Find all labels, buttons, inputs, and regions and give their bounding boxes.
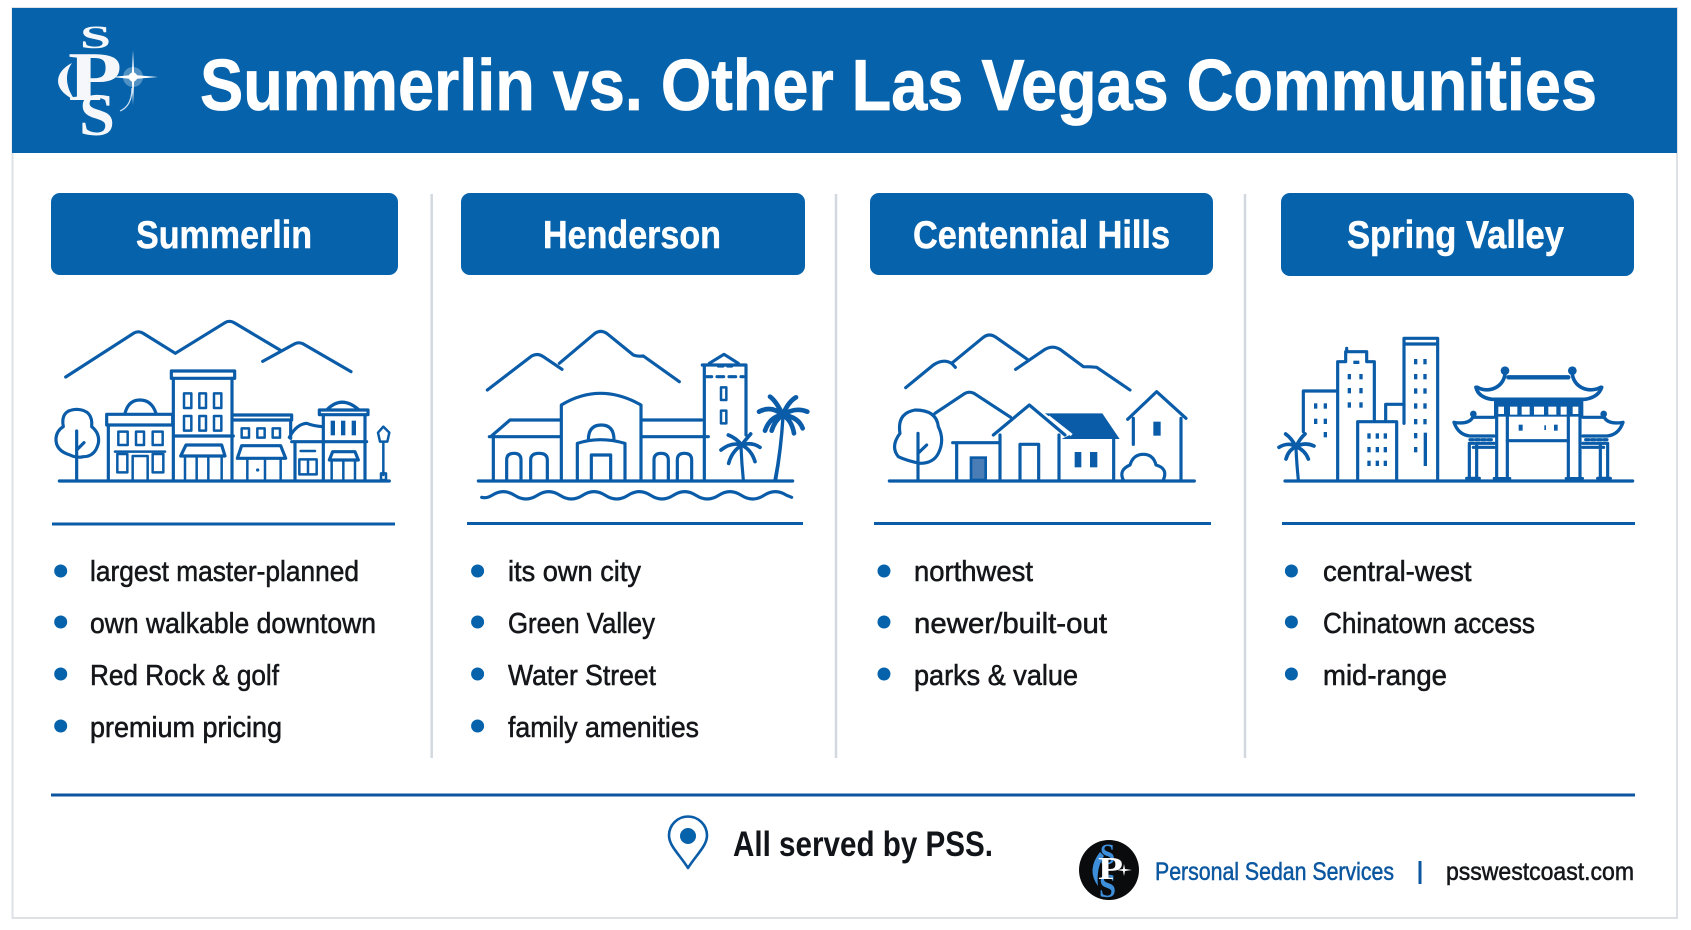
footer brand name: Personal Sedan Services — [1155, 858, 1394, 886]
icon: high-rises and Chinatown gate — [1279, 338, 1633, 481]
list: Summerlin: premium pricing — [90, 712, 282, 744]
footer brand logo: P — [1098, 850, 1123, 886]
header logo: P — [68, 39, 122, 116]
list: Henderson: its own city — [508, 556, 641, 588]
list: Summerlin: own walkable downtown — [90, 608, 376, 640]
list: Spring Valley: mid-range — [1323, 660, 1447, 692]
list: Henderson: Green Valley — [508, 608, 655, 640]
icon: downtown street with mountains — [56, 321, 389, 481]
heading: Henderson — [461, 193, 805, 275]
panel: Spring Valley — [1279, 193, 1635, 692]
list: Henderson: family amenities — [508, 712, 699, 744]
list: Spring Valley — [1285, 556, 1535, 692]
list: Summerlin: largest master-planned — [90, 556, 359, 588]
header logo: S — [80, 20, 111, 56]
header banner — [12, 8, 1677, 153]
list: Centennial Hills: parks & value — [914, 660, 1078, 692]
heading: Centennial Hills: Centennial Hills — [913, 214, 1170, 257]
heading: Summerlin — [51, 193, 398, 275]
panel: Henderson — [461, 193, 807, 744]
list: Centennial Hills: northwest — [914, 556, 1033, 588]
column dividers — [432, 194, 1245, 758]
footer brand logo: S — [1100, 838, 1115, 871]
header logo — [58, 20, 158, 148]
callout: all served by PSS: All served by PSS. — [733, 825, 993, 864]
footer website: psswestcoast.com — [1446, 858, 1634, 886]
footer brand logo: S — [1099, 868, 1116, 905]
list: Summerlin: Red Rock & golf — [90, 660, 280, 692]
icon: location pin — [669, 817, 707, 868]
heading: Henderson: Henderson — [543, 214, 721, 257]
list: Centennial Hills — [878, 556, 1107, 692]
footer rule — [51, 794, 1635, 796]
icon: mission building, tower, palms and water — [478, 331, 807, 499]
footer separator — [1418, 861, 1422, 884]
header logo: S — [79, 82, 115, 148]
heading: Spring Valley — [1281, 193, 1634, 276]
heading: Spring Valley: Spring Valley — [1347, 214, 1564, 257]
panel: Centennial Hills — [870, 193, 1213, 692]
list: Centennial Hills: newer/built-out — [914, 608, 1107, 640]
list: Spring Valley: central-west — [1323, 556, 1472, 588]
panel: Summerlin — [51, 193, 398, 744]
icon: suburban houses with mountains — [889, 335, 1194, 481]
list: Henderson: Water Street — [508, 660, 656, 692]
heading: Centennial Hills — [870, 193, 1213, 275]
heading: Summerlin: Summerlin — [136, 214, 312, 257]
footer brand logo — [1079, 838, 1139, 905]
list: Spring Valley: Chinatown access — [1323, 608, 1535, 640]
list: Summerlin — [54, 556, 376, 744]
list: Henderson — [471, 556, 699, 744]
